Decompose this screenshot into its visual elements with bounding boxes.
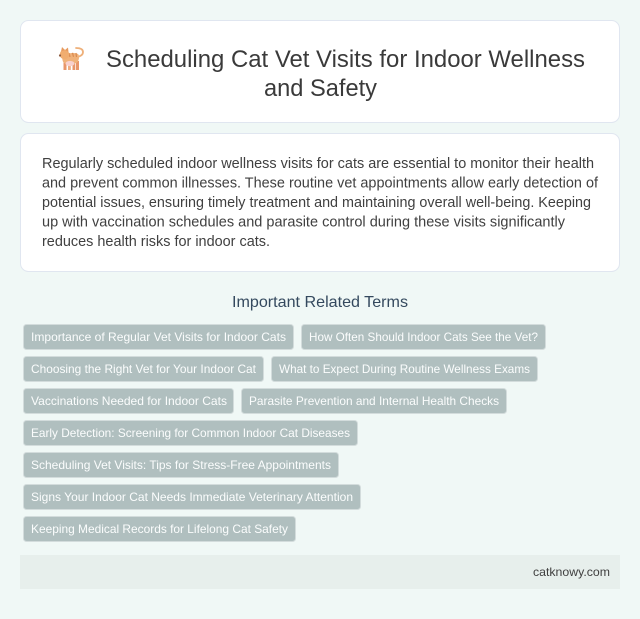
text block: introduction: Regularly scheduled indoor wellness visits for cats are essential to monitor their health: [42, 156, 594, 172]
tag: Scheduling Vet Visits: Tips for Stress-Free Appointments: [31, 458, 331, 472]
tag: Parasite Prevention and Internal Health Checks: [249, 394, 499, 408]
tag: How Often Should Indoor Cats See the Vet?: [309, 330, 538, 344]
tag: [24, 324, 294, 350]
tag: What to Expect During Routine Wellness Exams: [279, 362, 530, 376]
text block: introduction: and prevent common illnesses. These routine vet appointments allow early detection of: [42, 176, 599, 192]
footer: catknowy.com: [533, 565, 610, 579]
title: Scheduling Cat Vet Visits for Indoor Wellness: [106, 46, 585, 73]
tag: [24, 452, 338, 478]
text block: introduction: potential issues, ensuring timely treatment and maintaining overall well-being. Keeping: [42, 195, 591, 211]
tag: Choosing the Right Vet for Your Indoor Cat: [31, 362, 257, 376]
tag: [302, 324, 546, 350]
heading: related terms: Important Related Terms: [232, 294, 408, 311]
tag: [24, 356, 264, 382]
text block: introduction: [42, 156, 599, 250]
tag: [272, 356, 538, 382]
tag: [24, 388, 234, 414]
tag: Early Detection: Screening for Common Indoor Cat Diseases: [31, 426, 350, 440]
tag: [24, 516, 296, 542]
tag: Signs Your Indoor Cat Needs Immediate Veterinary Attention: [31, 490, 353, 504]
panel: introduction: [20, 134, 620, 272]
tag: [242, 388, 506, 414]
tag: [24, 420, 358, 446]
panel: title card: [20, 20, 620, 122]
text block: introduction: reduces health risks for indoor cats.: [42, 234, 270, 250]
title: [106, 46, 585, 102]
title: and Safety: [264, 75, 377, 102]
tag: [24, 484, 360, 510]
tag list: [24, 324, 546, 542]
tag: Keeping Medical Records for Lifelong Cat Safety: [31, 522, 288, 536]
icon: cat: [59, 47, 83, 70]
text block: introduction: up with vaccination schedules and parasite control during these visits significantly: [42, 214, 566, 230]
footer: [20, 555, 620, 589]
tag: Vaccinations Needed for Indoor Cats: [31, 394, 227, 408]
tag: Importance of Regular Vet Visits for Indoor Cats: [31, 330, 286, 344]
